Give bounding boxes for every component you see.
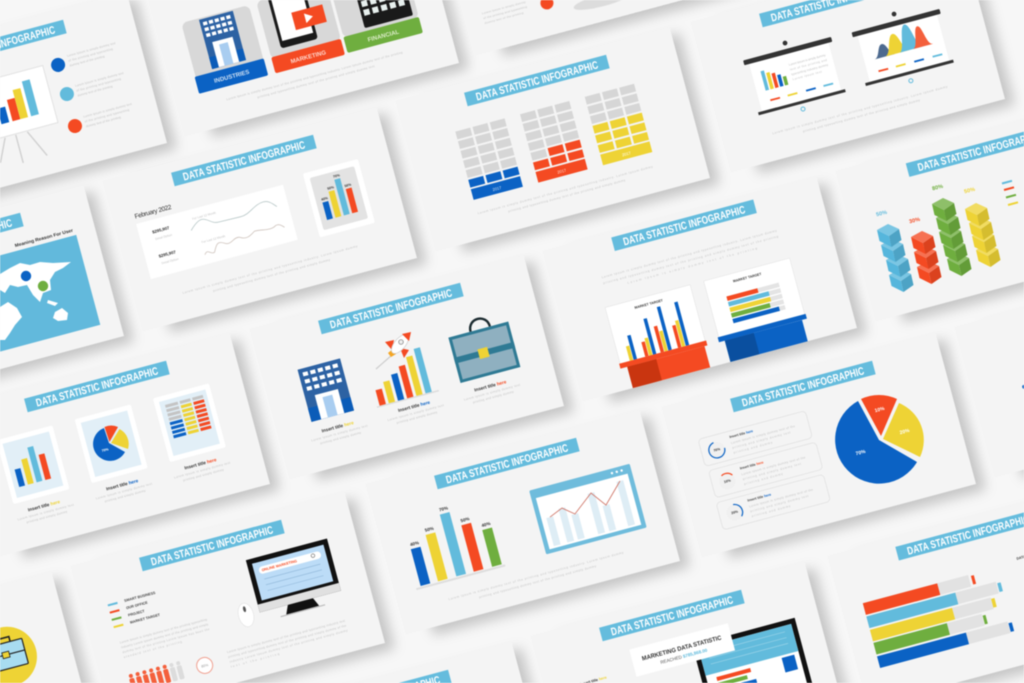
text lines: [481, 0, 529, 25]
card body text: Lorem Ipsum is simply dummy text: [174, 461, 231, 480]
white stats card: Detail Option: [155, 233, 173, 241]
caption text: printing and simply dummy: [396, 410, 438, 425]
title banner: [306, 670, 452, 683]
card: pie: [75, 404, 148, 483]
right body text: Lorem Ipsum is simply dummy text of the printing and typesetting industry text: [226, 619, 346, 654]
slide: projector screens: [690, 0, 1005, 173]
right body text: industry Lorem Ipsum dummy text of the printing and simply dummy: [229, 628, 348, 664]
end ticks: [971, 569, 1014, 638]
percentage labels: 50%: [876, 210, 888, 218]
list text: Lorem Ipsum is simply dummy text: [83, 102, 132, 119]
title banner: [0, 213, 24, 264]
slide: monitor and legend: [70, 492, 385, 683]
slide: briefcase bottom left: [0, 572, 92, 683]
slide: february dashboard: [102, 107, 417, 332]
map heading: Meaning Reason For User: [14, 228, 74, 248]
left body text: dummy text of the printing Lorem Ipsum has been the: [122, 627, 210, 654]
title banner: [24, 361, 170, 412]
chart card: 40%: [321, 196, 328, 202]
legend dashes: [879, 54, 942, 71]
line charts: [189, 198, 286, 257]
slide: three cards: [0, 333, 270, 558]
podium blue: [718, 314, 813, 363]
bar chart: [397, 495, 505, 590]
panel: industries: [180, 5, 268, 94]
list row 2: [708, 442, 823, 498]
title banner: DATA STATISTIC INFOGRAPHIC: [445, 442, 570, 487]
title banner: [599, 590, 745, 641]
body text: Lorem Ipsum is simply dummy text of the printing: [627, 246, 758, 285]
card captions: Insert title here: [106, 478, 139, 491]
screen text: Lorem Ipsum is simply dummy: [788, 53, 826, 67]
map markers: [21, 271, 48, 291]
title banner: [730, 361, 876, 412]
table 3: 2017: [621, 150, 632, 157]
stack: red: [911, 231, 942, 284]
monitor: [246, 538, 344, 622]
title banner: DATA STATISTIC INFOGRAPHIC: [610, 594, 735, 639]
title banner: DATA STATISTIC INFOGRAPHIC: [622, 204, 747, 248]
left body text: industry Lorem Ipsum dummy text of the printing and simply: [121, 622, 209, 649]
list row 1: printing and simply dummy text: [732, 430, 791, 450]
slide: market target: [542, 177, 857, 402]
stack: light blue: [877, 224, 914, 292]
list row 3: 20%: [731, 510, 738, 515]
window dots: [610, 469, 623, 475]
captions: Insert title here: [321, 420, 355, 433]
slide: yearly tables: [395, 27, 710, 252]
icon: keypad: [352, 0, 413, 28]
body text: Lorem Ipsum is simply dummy text of the printing and typesetting industry. Lorem Ipsum dummy: [182, 244, 358, 295]
people row: [128, 661, 185, 683]
bar labels: [403, 496, 491, 547]
body text: printing and typesetting dummy text of the printing and simply dummy: [508, 178, 626, 213]
monitor bars: [716, 667, 757, 683]
legend: [1002, 181, 1018, 205]
chart card: 50%: [327, 185, 334, 191]
table 1: [456, 122, 523, 200]
chart card: 70%: [333, 173, 340, 179]
right body text: [226, 619, 350, 669]
caption text: printing and simply dummy: [472, 390, 515, 404]
list row 3: printing and simply dummy text: [750, 494, 809, 513]
cube stacks: [877, 198, 1000, 292]
body text: printing and typesetting dummy text of the printing and simply dummy text: [257, 64, 375, 99]
list row 3: Lorem Ipsum is simply dummy text of the: [749, 487, 814, 508]
caption text: Lorem Ipsum is simply dummy text: [387, 403, 444, 422]
title banner: [139, 520, 285, 571]
chart heading: MARKET TARGET: [733, 272, 763, 283]
icon: building: [199, 11, 246, 69]
panel: financial: [328, 0, 423, 53]
world map shapes: [0, 262, 71, 340]
table 3: [586, 88, 652, 165]
shadow ellipse: [572, 0, 633, 14]
card: table: [153, 383, 226, 462]
list row 1: [698, 411, 812, 466]
icon: rocket: [376, 332, 412, 369]
white stats card: For Last 12 Month: [192, 211, 217, 221]
light columns: [542, 480, 635, 546]
slide: line chart window: [365, 410, 680, 635]
card body text: printing and simply dummy: [183, 467, 225, 482]
label: MARKETING: [290, 50, 327, 65]
screen text: typesetting industry dummy: [791, 63, 829, 76]
map panel: [0, 235, 100, 362]
slide: building rocket briefcase: [249, 255, 564, 480]
marker dot: [1022, 384, 1024, 389]
left body text: standard text of the printing: [123, 640, 183, 659]
list row 2: Insert title here: [739, 460, 764, 470]
body text: printing and typesetting dummy text of the printing and simply dummy: [213, 258, 331, 293]
captions: [321, 379, 507, 433]
numbered circles: [50, 56, 84, 135]
slide: industries marketing financial: [144, 0, 459, 137]
legend: SMART BUSINESS: [124, 591, 156, 603]
body text: printing and typesetting dummy text of the printing and simply dummy: [802, 98, 921, 133]
list text: [67, 41, 135, 128]
list text: dummy text of the printing: [77, 84, 113, 97]
icon: mouse: [236, 601, 256, 629]
text lines: Lorem Ipsum is simply dummy: [481, 0, 526, 15]
stack: green: [932, 198, 972, 276]
stats numbers: [152, 225, 177, 259]
title banner: DATA STATISTIC INFOGRAPHIC: [35, 365, 160, 410]
bars: [761, 65, 788, 91]
icon: building: [298, 358, 354, 422]
legend: [107, 591, 162, 629]
card body text: Lorem Ipsum is simply dummy text: [17, 503, 74, 521]
list row 2: 10%: [724, 478, 731, 484]
icon: tablet with video: [267, 0, 330, 49]
podium red: [619, 340, 713, 390]
caption text: Lorem Ipsum is simply dummy text: [311, 424, 368, 443]
left body text: [119, 617, 212, 659]
card body text: [17, 461, 232, 526]
captions: Insert title here: [474, 379, 507, 393]
list text: Lorem Ipsum is simply dummy text: [67, 41, 116, 58]
list text: of the printing and typesetting: [68, 47, 114, 63]
pie labels: [855, 406, 911, 457]
caption text: printing and simply dummy: [320, 430, 362, 445]
white headline card: MARKETING DATA STATISTIC: [641, 634, 723, 663]
easel board with bars: [0, 66, 58, 144]
horizontal bars: [726, 283, 786, 323]
list row 1: printing and dummy: [733, 440, 773, 455]
body text: Lorem Ipsum is simply dummy text of the printing and typesetting industry. Lorem Ipsum dummy: [772, 84, 948, 135]
label: INDUSTRIES: [214, 70, 250, 85]
percentage labels: [876, 184, 976, 225]
bar track background: [863, 568, 1011, 668]
slide: world map: [0, 185, 124, 410]
card captions: [27, 457, 217, 512]
card captions: Insert title here: [27, 499, 61, 512]
pie labels: 10%: [874, 406, 886, 414]
board left: [605, 285, 706, 365]
slide: cube stacks: [835, 97, 1024, 325]
bar labels: 50%: [424, 526, 434, 533]
card body text: printing and simply dummy: [26, 509, 68, 524]
title banner: [611, 199, 757, 251]
stats numbers: $295,907: [152, 225, 170, 235]
chart card: [303, 159, 375, 237]
list row 1: Insert title here: [729, 429, 754, 439]
list row 3: [716, 474, 831, 530]
screen text: Lorem Ipsum text: [792, 70, 822, 81]
slide: far right partial: [954, 253, 1024, 478]
gauge: [195, 656, 214, 675]
legend: MARKET TARGET: [130, 613, 161, 625]
trend line: [546, 481, 625, 520]
list row 3: printing and dummy: [751, 504, 791, 518]
bar labels: 40%: [409, 540, 419, 547]
gauge: 80%: [201, 663, 209, 669]
pie chart: 70%: [101, 447, 110, 453]
title banner: [171, 135, 317, 186]
bar labels: 50%: [460, 516, 470, 523]
grouped bars: [618, 302, 689, 361]
caption text: [311, 383, 522, 447]
title banner: [318, 283, 464, 334]
slide: easel chart top left: [0, 0, 167, 217]
bar fills: [863, 579, 969, 668]
browser window chart: [529, 464, 647, 554]
slide: marketing data statistic: [530, 562, 845, 683]
panel: marketing: [256, 0, 345, 73]
body text: printing and typesetting dummy text of the printing and simply dummy text of the printing: [603, 234, 779, 285]
table 2: [521, 105, 588, 183]
pie labels: 20%: [899, 428, 911, 436]
caption text: Lorem Ipsum is simply dummy text: [463, 383, 521, 402]
title banner: [464, 55, 610, 106]
percentage labels: 30%: [909, 217, 921, 225]
screen text: [788, 53, 830, 81]
bar labels: 40%: [481, 521, 491, 528]
chart card: 50%: [344, 183, 352, 188]
card body text: Lorem Ipsum is simply dummy text: [95, 482, 153, 501]
right body text: printing and typesetting dummy text of the printing and simply dummy of the: [228, 623, 347, 659]
slide: partial top centre: [435, 0, 750, 56]
white stats card: Detail Option: [161, 257, 179, 265]
blue square: [782, 655, 798, 673]
white stats card: [136, 185, 298, 279]
body text: Lorem Ipsum is simply dummy text of the printing and typesetting industry. Lorem Ipsum dummy: [448, 550, 624, 601]
monitor: [692, 618, 817, 683]
body text: printing and typesetting dummy text of the printing and simply dummy: [479, 564, 597, 599]
table 2: 2017: [557, 167, 567, 175]
legend dashes: [770, 83, 833, 100]
title banner: DATA STATISTIC INFOGRAPHIC: [741, 365, 866, 410]
icon: briefcase: [446, 311, 520, 383]
list row 3: Insert title here: [747, 492, 772, 503]
pie labels: 70%: [855, 449, 867, 457]
list row 1: 70%: [713, 447, 721, 453]
search pill: ONLINE MARKETING: [261, 559, 298, 572]
icon: red circle: [539, 0, 555, 11]
title banner: DATA STATISTIC INFOGRAPHIC: [150, 524, 275, 569]
legend: OUR OFFICE: [126, 600, 149, 610]
slide: partial bottom centre: [237, 642, 552, 683]
date heading: February 2022: [134, 204, 173, 221]
list row 2: printing and dummy: [744, 472, 784, 486]
body text: Lorem Ipsum is simply dummy text of the printing and typesetting industry. Lorem Ipsum dummy: [477, 164, 654, 215]
label: FINANCIAL: [367, 29, 400, 44]
projector right: [849, 0, 956, 94]
board right: [704, 258, 805, 339]
list row 2: printing and simply dummy text: [742, 462, 801, 481]
table 1: 2017: [492, 185, 503, 192]
legend: PROJECT: [128, 609, 146, 617]
list row 2: Lorem Ipsum is simply dummy text of the: [741, 455, 806, 476]
percentage labels: 80%: [932, 184, 944, 192]
slide: progress bars: [827, 482, 1024, 683]
left body text: Lorem Ipsum is simply dummy text of the printing typesetting: [119, 617, 208, 645]
list text: Lorem Ipsum is simply dummy text: [75, 71, 124, 88]
body text: Lorem Ipsum is simply dummy text of the printing and typesetting industry. Lorem Ipsum dummy text of the printing: [226, 50, 403, 101]
bar labels: 70%: [438, 505, 448, 513]
percentage labels: 50%: [964, 187, 976, 195]
icon: yellow circle briefcase: [0, 620, 44, 683]
list text: dummy text of the printing: [85, 115, 122, 128]
title banner: [434, 438, 580, 489]
white headline card: [629, 623, 735, 677]
title banner: DATA STATISTIC INFOGRAPHIC: [329, 287, 454, 332]
captions: Insert title here: [397, 400, 431, 413]
title banner: DATA STATISTIC INFOGRAPHIC: [182, 139, 307, 184]
slide: pie chart with list: [661, 333, 976, 558]
list text: of the printing and typesetting: [76, 77, 122, 93]
stats numbers: $295,907: [158, 249, 177, 259]
text lines: dummy text of the printing: [484, 11, 524, 25]
white headline card: REACHED $785,868.00: [660, 647, 708, 665]
body text: Lorem Ipsum is simply dummy text of the printing and typesetting industry. Lorem Ipsum dummy: [601, 228, 778, 279]
title banner: [0, 20, 67, 71]
white stats card: For Last 12 Month: [201, 234, 226, 244]
easel legs: [0, 128, 47, 169]
card captions: Insert title here: [184, 457, 217, 471]
screen text: text of the printing and: [790, 58, 828, 72]
text lines: of the printing and typesetting: [483, 5, 528, 20]
pie chart: [835, 395, 924, 484]
list row 1: Lorem Ipsum is simply dummy text of the: [731, 424, 796, 445]
chart heading: MARKET TARGET: [634, 298, 664, 310]
card: bars: [0, 425, 69, 504]
projector left: [741, 29, 848, 123]
bell curves: [868, 19, 933, 59]
list text: dummy text of the printing: [69, 54, 105, 67]
bar chart with rocket: [358, 320, 439, 408]
title banner: DATA STATISTIC INFOGRAPHIC: [475, 59, 600, 104]
list text: of the printing and typesetting: [84, 108, 130, 124]
card body text: printing and simply dummy: [104, 488, 146, 503]
right body text: text of the printing: [230, 652, 280, 669]
stack: yellow: [965, 203, 1000, 267]
